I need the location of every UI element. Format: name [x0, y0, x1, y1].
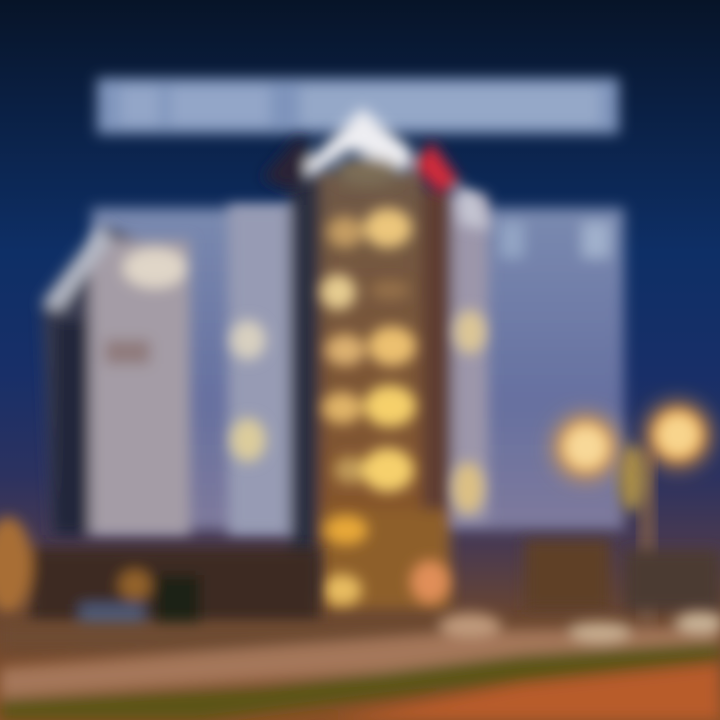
title band (illegible blurred heading)	[97, 78, 619, 134]
lower podium	[320, 510, 450, 610]
centre building	[228, 170, 488, 610]
street level and lower buildings	[0, 517, 720, 636]
left wing	[228, 205, 292, 535]
street lamps	[554, 403, 710, 640]
right column	[422, 190, 452, 520]
right wing	[452, 195, 488, 520]
dark side column	[290, 170, 320, 600]
road and foreground	[0, 612, 720, 720]
back panel: translucent content card	[92, 208, 624, 530]
lit windows	[230, 208, 486, 606]
left building	[42, 225, 190, 535]
core	[320, 170, 424, 610]
roof crown	[262, 108, 490, 230]
